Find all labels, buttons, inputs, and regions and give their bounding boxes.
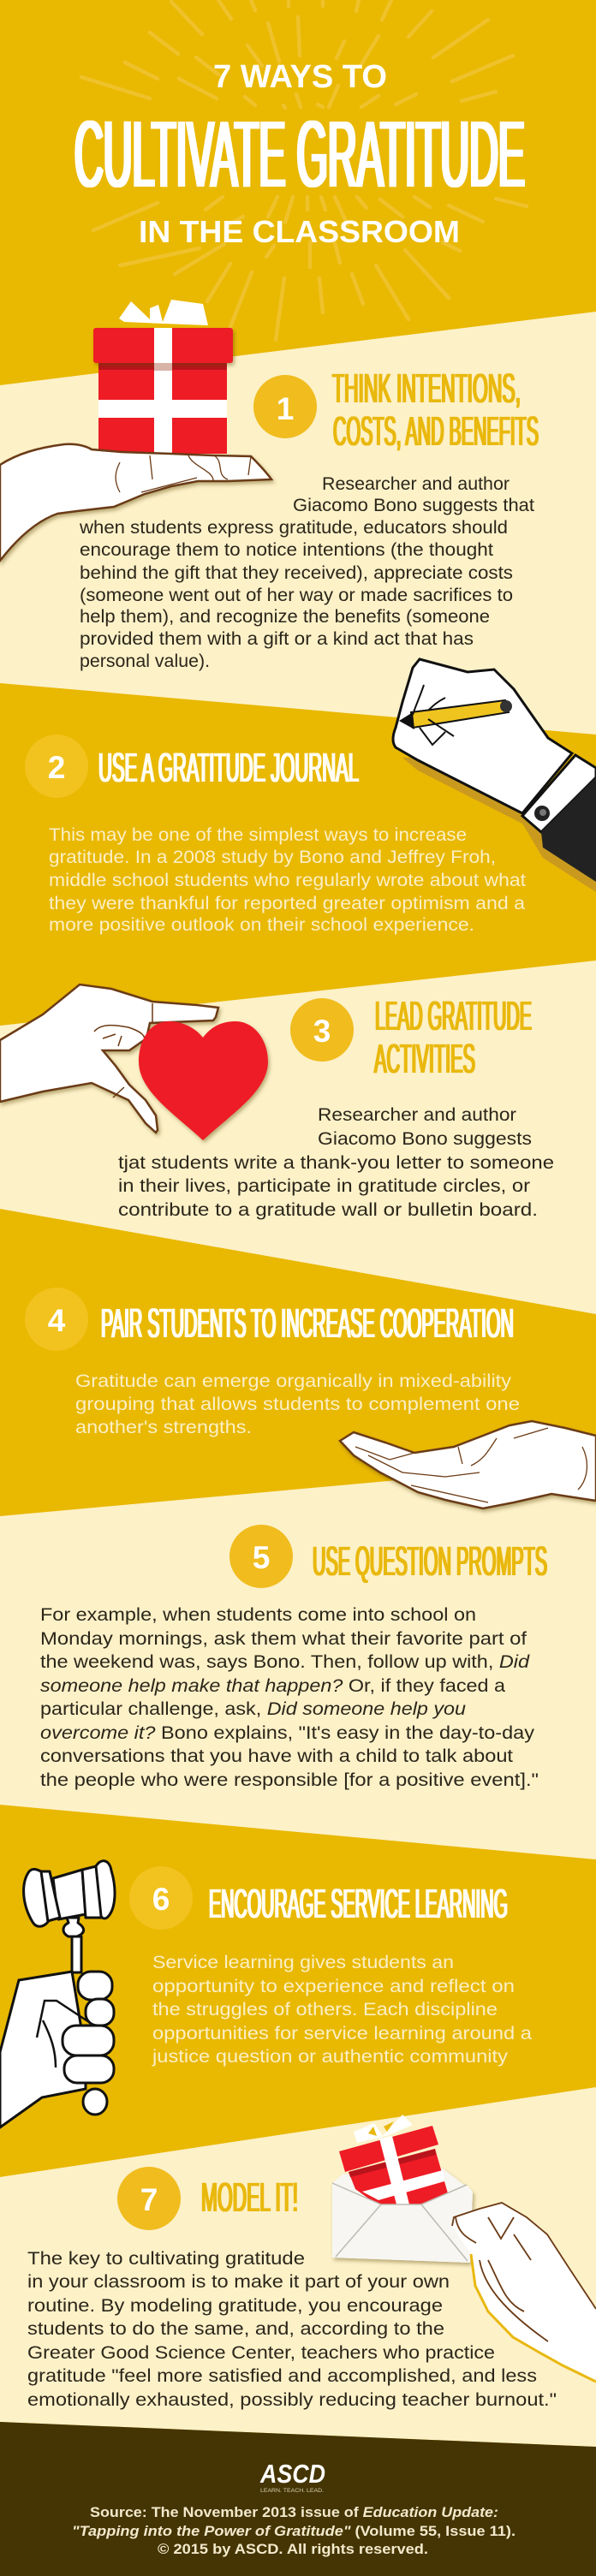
text block 6: Service learning gives students an: [152, 1953, 454, 1972]
pencil: [399, 700, 512, 729]
text block 4: [75, 1371, 520, 1437]
text block 7: routine. By modeling gratitude, you encourage: [27, 2296, 443, 2316]
text block 7: students to do the same, and, according to the: [27, 2319, 444, 2339]
envelope: [332, 2115, 473, 2263]
source credit: "Tapping into the Power of Gratitude" (Volume 55, Issue 11).: [72, 2523, 516, 2539]
text block 6: [152, 1953, 532, 2067]
text block 6: justice question or authentic community: [152, 2047, 509, 2067]
number 5 badge: [229, 1525, 293, 1588]
icon: envelope with gift and hand: [332, 2115, 596, 2382]
text block 2: gratitude. In a 2008 study by Bono and Jeffrey Froh,: [49, 848, 496, 867]
text block 7: Greater Good Science Center, teachers who practice: [27, 2343, 495, 2363]
sunburst rays behind title: [81, 0, 527, 340]
text block 4: another's strengths.: [75, 1418, 252, 1437]
text block 4: Gratitude can emerge organically in mixed-ability: [75, 1371, 512, 1391]
number 3 badge: [290, 998, 354, 1062]
number 7 badge: 7: [140, 2182, 158, 2217]
text block 5: conversations that you have with a child to talk about: [40, 1746, 513, 1766]
text block 2: more positive outlook on their school experience.: [49, 915, 474, 935]
number 6 badge: [129, 1866, 193, 1930]
icon: hand writing with pencil: [393, 659, 596, 892]
number 2 badge: 2: [48, 750, 65, 785]
gift box: [93, 300, 233, 454]
text block 3: [118, 1105, 554, 1220]
text block 1: [79, 474, 534, 671]
number 2 badge: [25, 735, 88, 798]
text block 7: emotionally exhausted, possibly reducing teacher burnout.": [27, 2390, 557, 2410]
title: 7 WAYS TO: [213, 59, 387, 95]
text block 3: contribute to a gratitude wall or bulletin board.: [118, 1200, 538, 1220]
infographic canvas: MODEL IT!: [201, 2175, 298, 2221]
heading 1: [332, 366, 539, 455]
text block 1: Researcher and author: [322, 474, 510, 494]
heart: [139, 1021, 268, 1140]
number 3 badge: 3: [313, 1014, 331, 1049]
icon: hand holding gift: [0, 300, 271, 561]
icon: open hand: [340, 1421, 596, 1508]
number 4 badge: [25, 1288, 88, 1351]
text block 5: Monday mornings, ask them what their favorite part of: [40, 1629, 527, 1649]
text block 2: middle school students who regularly wrote about what: [49, 871, 526, 890]
gavel head: [24, 1861, 115, 1972]
title: IN THE CLASSROOM: [139, 214, 460, 249]
text block 5: the weekend was, says Bono. Then, follow up with, Did: [40, 1652, 530, 1672]
ASCD logo: LEARN. TEACH. LEAD.: [260, 2489, 324, 2494]
source credit: © 2015 by ASCD. All rights reserved.: [158, 2541, 428, 2557]
text block 5: For example, when students come into school on: [40, 1605, 476, 1625]
text block 6: opportunities for service learning around a: [152, 2024, 532, 2044]
text block 3: in their lives, participate in gratitude circles, or: [118, 1176, 530, 1196]
text block 7: The key to cultivating gratitude: [27, 2249, 305, 2269]
text block 3: Researcher and author: [318, 1105, 516, 1125]
icon: hand holding heart: [0, 985, 268, 1140]
number 4 badge: 4: [48, 1303, 66, 1338]
text block 7: [27, 2249, 557, 2410]
source credit: [72, 2504, 516, 2557]
text block 6: the struggles of others. Each discipline: [152, 2000, 498, 2020]
text block 1: personal value).: [80, 651, 210, 671]
text block 7: in your classroom is to make it part of your own: [27, 2272, 450, 2292]
icon: hand holding gavel: [0, 1861, 115, 2127]
text block 1: help them), and recognize the benefits (someone: [80, 607, 490, 627]
text block 7: gratitude "feel more satisfied and accomplished, and less: [27, 2366, 537, 2386]
number 1 badge: 1: [277, 391, 294, 426]
number 7 badge: [117, 2167, 181, 2230]
number 5 badge: 5: [253, 1540, 270, 1575]
text block 6: opportunity to experience and reflect on: [152, 1977, 515, 1996]
text block 5: particular challenge, ask, Did someone help you: [40, 1699, 466, 1719]
text block 3: tjat students write a thank-you letter to someone: [118, 1153, 554, 1173]
text block 5: overcome it? Bono explains, "It's easy in the day-to-day: [40, 1723, 535, 1743]
ASCD logo: ASCD: [259, 2459, 325, 2489]
text block 1: encourage them to notice intentions (the thought: [80, 540, 493, 560]
heading 3: ACTIVITIES: [374, 1037, 475, 1082]
text block 4: grouping that allows students to complement one: [75, 1395, 520, 1414]
text block 5: [40, 1605, 539, 1790]
text block 2: they were thankful for reported greater optimism and a: [49, 894, 525, 913]
handle end: [83, 2089, 107, 2115]
text block 1: provided them with a gift or a kind act that has: [80, 629, 474, 649]
text block 1: behind the gift that they received), appreciate costs: [80, 563, 513, 583]
text block 1: when students express gratitude, educators should: [79, 518, 508, 538]
footer band: [0, 2422, 596, 2576]
source credit: Source: The November 2013 issue of Education Update:: [90, 2504, 498, 2520]
number 1 badge: [253, 375, 317, 438]
heading 3: [374, 994, 532, 1082]
text block 2: This may be one of the simplest ways to increase: [49, 825, 467, 845]
text block 1: (someone went out of her way or made sacrifices to: [80, 586, 513, 605]
text block 5: someone help make that happen? Or, if they faced a: [40, 1676, 505, 1696]
text block 2: [49, 825, 526, 935]
text block 1: Giacomo Bono suggests that: [293, 496, 534, 515]
text block 5: the people who were responsible [for a positive event].": [40, 1770, 539, 1790]
title: [74, 59, 525, 249]
number 6 badge: 6: [152, 1882, 170, 1917]
text block 3: Giacomo Bono suggests: [318, 1129, 532, 1149]
